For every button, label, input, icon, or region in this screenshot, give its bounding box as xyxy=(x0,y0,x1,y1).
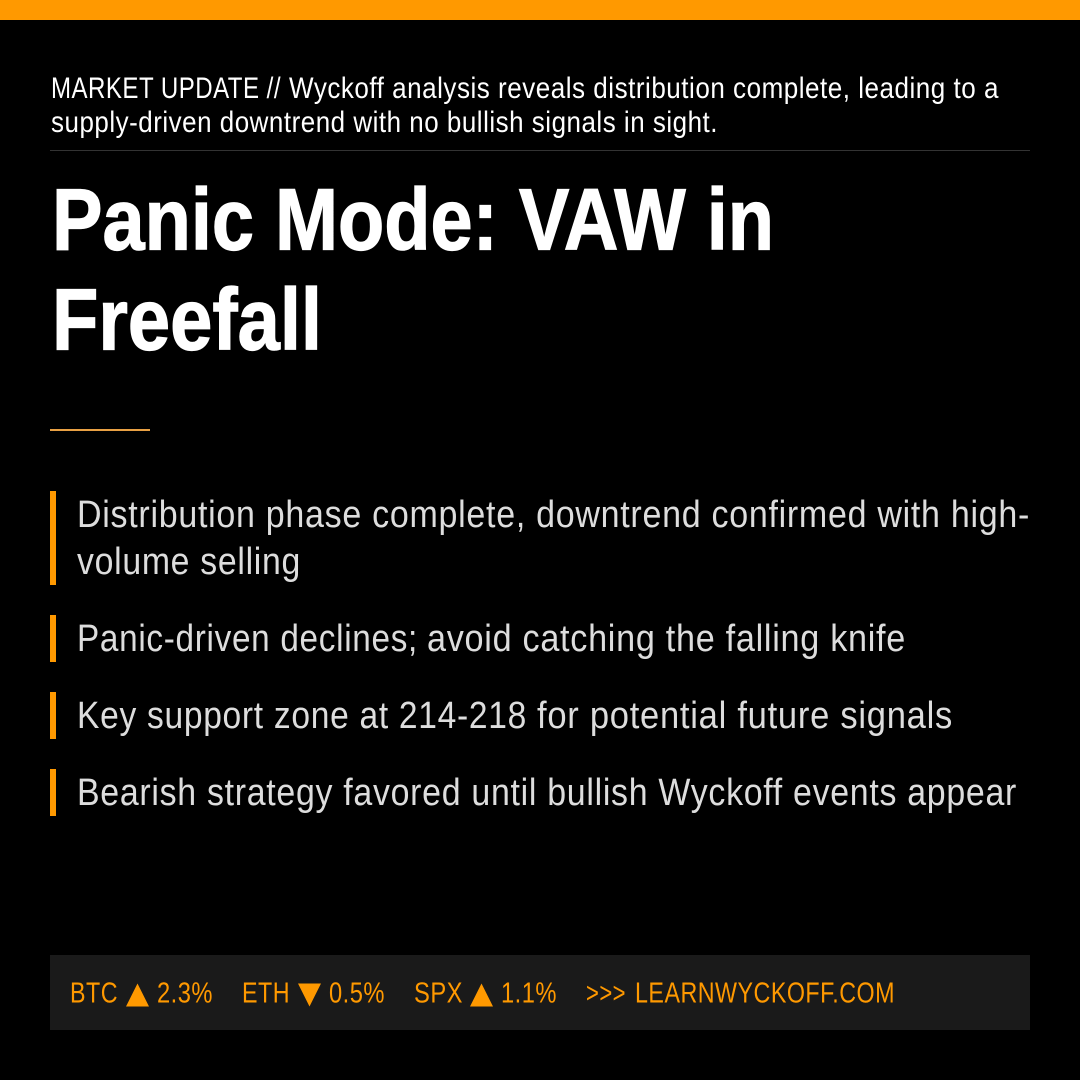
short accent divider xyxy=(50,429,150,431)
bullet 1: volume selling xyxy=(77,541,301,583)
ticker: SPX: 1.1% xyxy=(501,978,557,1010)
ticker: BTC xyxy=(70,978,213,1010)
ticker: ETH: ETH xyxy=(242,978,290,1010)
ticker: website link: >>> xyxy=(586,978,626,1010)
bullet 3: for potential future signals xyxy=(537,695,953,737)
bullet 1 xyxy=(50,491,1030,585)
bullet 2: Panic-driven declines; xyxy=(77,618,418,660)
ticker: ETH: 0.5% xyxy=(329,978,385,1010)
subtitle: market update: MARKET UPDATE // xyxy=(51,72,281,105)
subtitle: market update: supply-driven downtrend with no bullish signals in sight. xyxy=(51,106,718,139)
ticker: SPX: SPX xyxy=(414,978,463,1010)
bullet 3: Key support zone at 214-218 xyxy=(77,695,527,737)
ticker: BTC: 2.3% xyxy=(157,978,213,1010)
top accent bar xyxy=(0,0,1080,20)
ticker: SPX xyxy=(414,978,557,1010)
title: Panic Mode: VAW in xyxy=(52,172,774,268)
ticker: website link: LEARNWYCKOFF.COM xyxy=(635,978,895,1010)
key points list xyxy=(50,491,1030,816)
ticker: website link xyxy=(586,978,895,1010)
ticker: ETH xyxy=(242,978,385,1010)
bullet 3 xyxy=(50,692,953,739)
bullet 2 xyxy=(50,615,906,662)
bullet 2: avoid catching the falling knife xyxy=(427,618,906,660)
title xyxy=(52,172,774,368)
subtitle: market update xyxy=(51,72,999,139)
title: Freefall xyxy=(52,272,322,368)
ticker: BTC: BTC xyxy=(70,978,118,1010)
ticker panel xyxy=(50,955,1030,1030)
